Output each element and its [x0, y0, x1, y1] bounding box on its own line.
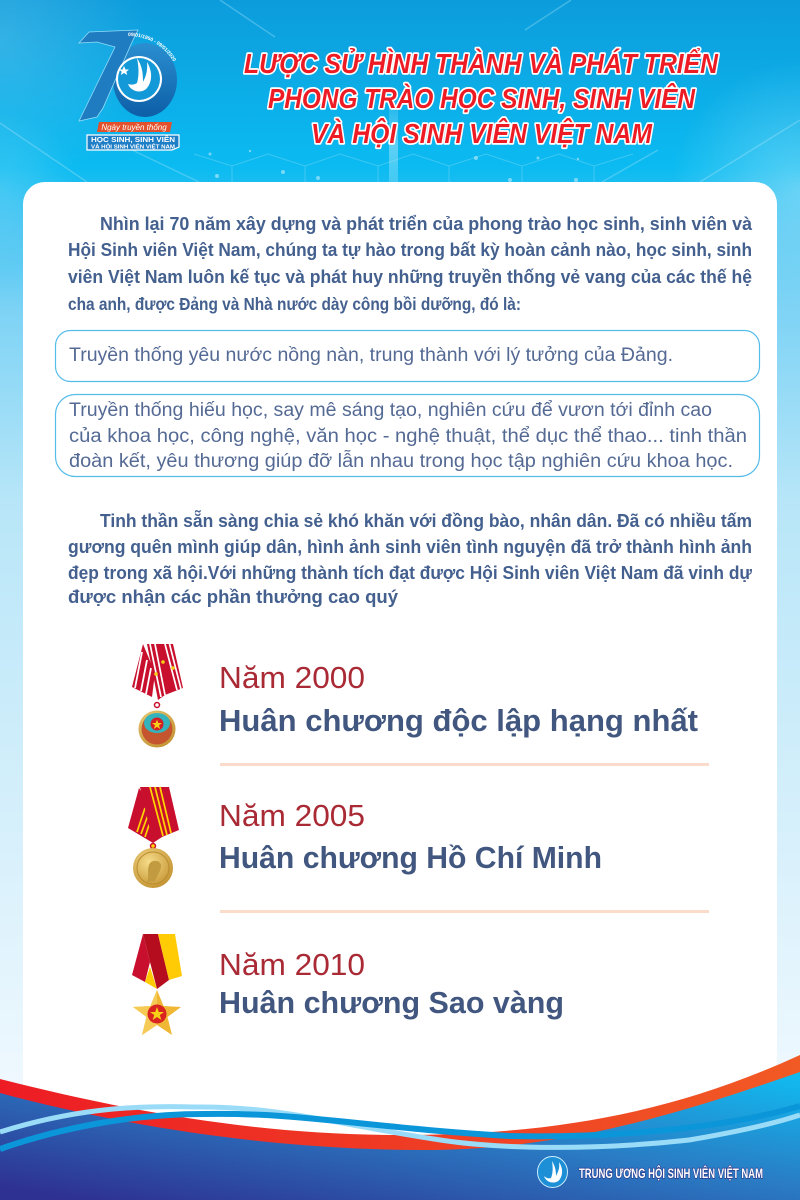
callout: patriotism tradition	[56, 330, 760, 382]
callout: study tradition: đoàn kết, yêu thương giúp đỡ lẫn nhau trong học tập nghiên cứu khoa học.	[69, 450, 733, 472]
callout: patriotism tradition: Truyền thống yêu nước nồng nàn, trung thành với lý tưởng của Đảng.	[69, 345, 673, 366]
title: LƯỢC SỬ HÌNH THÀNH VÀ PHÁT TRIỂN	[244, 47, 719, 79]
icon: independence medal	[132, 644, 183, 748]
award 2000: Năm 2000	[219, 660, 365, 695]
award 2000: Huân chương độc lập hạng nhất	[219, 703, 698, 738]
title: VÀ HỘI SINH VIÊN VIỆT NAM	[311, 117, 653, 149]
award 2010: Năm 2010	[219, 947, 365, 982]
second paragraph: đẹp trong xã hội.Với những thành tích đạt được Hội Sinh viên Việt Nam đã vinh dự	[68, 562, 753, 583]
second paragraph	[68, 509, 753, 607]
logo: 70 years: 09/01/1950 - 09/01/2020	[128, 32, 176, 61]
callout: study tradition: của khoa học, công nghệ, văn học - nghệ thuật, thể dục thể thao... tinh thần	[69, 426, 747, 447]
title: PHONG TRÀO HỌC SINH, SINH VIÊN	[268, 83, 696, 114]
award 2005	[219, 798, 602, 875]
second paragraph: Tinh thần sẵn sàng chia sẻ khó khăn với đồng bào, nhân dân. Đã có nhiều tấm	[100, 509, 752, 531]
award 2005: Huân chương Hồ Chí Minh	[219, 840, 602, 875]
intro paragraph	[68, 213, 753, 314]
icon: Ho Chi Minh medal	[128, 787, 179, 888]
second paragraph: được nhận các phần thưởng cao quý	[68, 586, 399, 607]
logo: 70 years: Ngày truyền thống	[101, 123, 167, 132]
award 2005: Năm 2005	[219, 798, 365, 833]
icon: gold star medal	[132, 934, 182, 1035]
logo: 70 years	[78, 30, 180, 151]
logo: 70 years: VÀ HỘI SINH VIÊN VIỆT NAM	[91, 142, 175, 150]
footer logo	[538, 1156, 568, 1188]
intro paragraph: Hội Sinh viên Việt Nam, chúng ta tự hào trong bất kỳ hoàn cảnh nào, học sinh, sinh	[68, 239, 752, 260]
award 2000	[219, 660, 698, 738]
callout: study tradition	[56, 394, 760, 476]
main white panel	[23, 182, 777, 1152]
award 2010	[219, 947, 564, 1020]
second paragraph: gương quên mình giúp dân, hình ảnh sinh viên tình nguyện đã trở thành hình ảnh	[68, 536, 752, 557]
award 2010: Huân chương Sao vàng	[219, 985, 564, 1020]
intro paragraph: cha anh, được Đảng và Nhà nước dày công bồi dưỡng, đó là:	[68, 294, 521, 314]
callout: study tradition: Truyền thống hiếu học, say mê sáng tạo, nghiên cứu để vươn tới đỉnh cao	[69, 400, 712, 421]
intro paragraph: viên Việt Nam luôn kế tục và phát huy những truyền thống vẻ vang của các thế hệ	[68, 266, 752, 287]
intro paragraph: Nhìn lại 70 năm xây dựng và phát triển của phong trào học sinh, sinh viên và	[100, 213, 753, 234]
logo: 70 years: HỌC SINH, SINH VIÊN	[91, 135, 175, 144]
footer wave band	[0, 1055, 800, 1200]
title	[244, 47, 719, 149]
